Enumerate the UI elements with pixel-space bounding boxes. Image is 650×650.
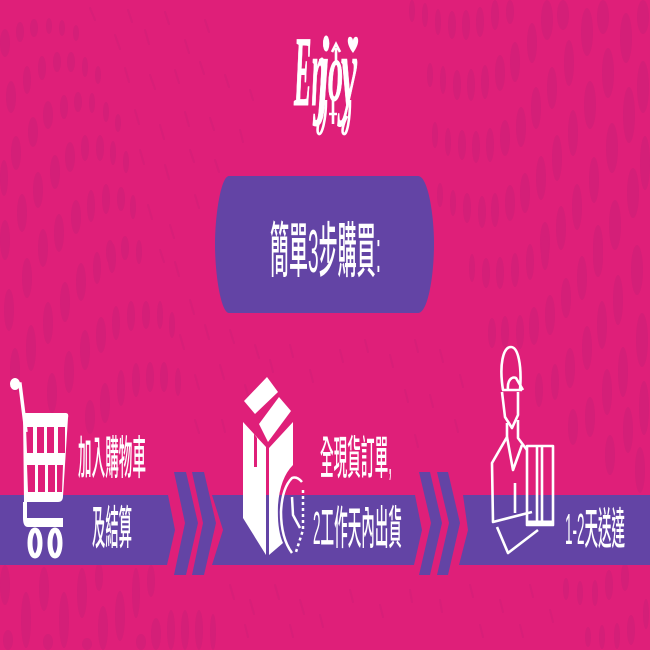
text: y [337, 16, 357, 127]
step 1: add to cart [0, 378, 216, 575]
text: 2工作天內出貨 [313, 502, 402, 554]
logo: Enjoy [294, 16, 358, 134]
logo heart [348, 37, 358, 53]
title pill [215, 176, 434, 313]
step 3: delivery [459, 347, 650, 565]
text: 簡單3步購買: [270, 218, 381, 285]
chevrons 2 [419, 472, 460, 575]
step 2: ship order: 全現貨訂單, [320, 432, 392, 484]
step 2: ship order [212, 377, 460, 575]
band 1 [0, 495, 175, 565]
band 2 [212, 495, 422, 565]
logo: Enjoy: En [294, 16, 326, 127]
chevrons 1 [174, 472, 216, 575]
background diagonal streaks [90, 8, 553, 637]
icon: delivery person with parcel [492, 347, 553, 553]
icon: shopping cart [10, 378, 68, 556]
step 1: add to cart: 及結算 [92, 502, 132, 554]
step 1: add to cart: 加入購物車 [78, 432, 146, 484]
logo letter tails and gender marks [318, 44, 350, 134]
logo: Enjoy: o [328, 26, 343, 119]
icon: parcel box with clock [243, 377, 303, 555]
logo: Enjoy: j [312, 16, 329, 127]
band 3 [459, 495, 650, 565]
